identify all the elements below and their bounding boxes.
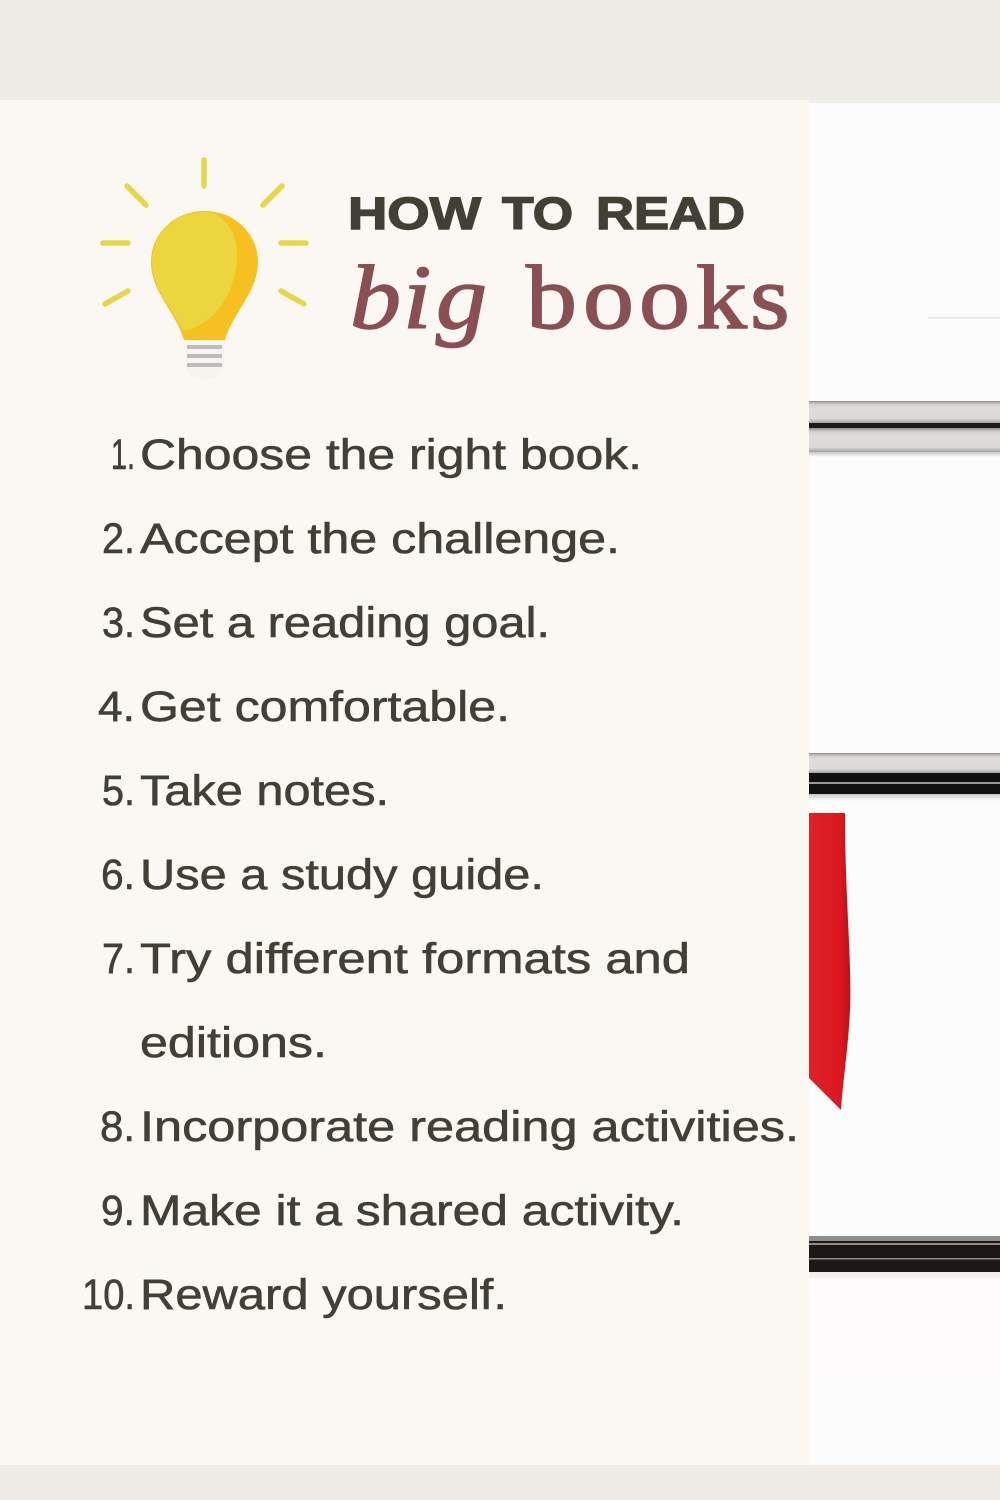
heading: big books: books — [526, 247, 790, 348]
heading: how to read — [348, 188, 745, 239]
item 9: Make it a shared activity. — [140, 1187, 684, 1235]
numbered list — [82, 431, 799, 1319]
item 9: 9. — [101, 1187, 135, 1235]
heading: how to read: READ — [596, 188, 745, 239]
heading: big books — [350, 247, 790, 348]
bulb glass — [151, 211, 258, 340]
bulb highlight — [152, 212, 237, 331]
item 5: 5. — [102, 767, 135, 815]
item 8: Incorporate reading activities. — [140, 1103, 799, 1151]
icon: red ribbon bookmark — [809, 813, 850, 1110]
item 6: 6. — [101, 851, 135, 899]
item 4: Get comfortable. — [140, 683, 510, 731]
heading: how to read: TO — [502, 188, 573, 239]
item 10: 10. — [82, 1271, 135, 1319]
item 8: 8. — [100, 1103, 135, 1151]
item 7: editions. — [140, 1019, 327, 1067]
panel: cream content card — [0, 100, 809, 1465]
heading: big books: big — [350, 247, 487, 348]
item 2: Accept the challenge. — [140, 515, 620, 563]
bulb base — [185, 340, 224, 380]
item 2: 2. — [102, 515, 135, 563]
item 10: Reward yourself. — [140, 1271, 507, 1319]
heading: how to read: HOW — [348, 188, 482, 239]
item 7: 7. — [102, 935, 135, 983]
item 1: 1. — [111, 431, 135, 479]
rays — [103, 160, 306, 304]
item 6: Use a study guide. — [140, 851, 544, 899]
item 5: Take notes. — [140, 767, 389, 815]
icon: light bulb — [103, 160, 306, 380]
item 4: 4. — [98, 683, 135, 731]
item 3: 3. — [102, 599, 135, 647]
item 3: Set a reading goal. — [140, 599, 550, 647]
item 1: Choose the right book. — [140, 431, 642, 479]
photo: stack of white books with red ribbon — [809, 100, 1000, 1465]
item 7: Try different formats and — [140, 935, 690, 983]
item 7 — [102, 935, 690, 1067]
